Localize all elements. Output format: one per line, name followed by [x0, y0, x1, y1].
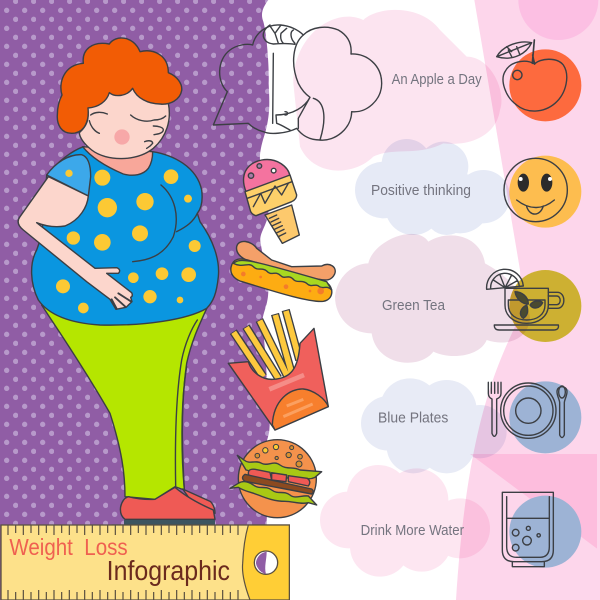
- cloud: Blue Plates: [361, 378, 507, 473]
- purple polka dot panel: [0, 0, 270, 600]
- label: An Apple a Day: An Apple a Day: [392, 72, 482, 88]
- colored circle: water: [509, 496, 581, 568]
- icon: tea cup: [487, 269, 564, 330]
- yellow polka dots: [56, 169, 201, 313]
- icon: smiley: [504, 158, 567, 222]
- ruler end tab: [242, 525, 289, 600]
- icon: head in speech bubble: [213, 25, 382, 140]
- back shoe: [183, 489, 215, 513]
- icon: apple: [497, 40, 567, 111]
- cloud: Green Tea: [335, 234, 530, 363]
- pink circle top right: [518, 0, 598, 40]
- icon: plate and cutlery: [488, 382, 567, 438]
- icon: hot dog: [231, 241, 335, 301]
- label: Drink More Water: Drink More Water: [361, 523, 464, 539]
- title: Infographic: Infographic: [107, 555, 230, 586]
- cloud: An Apple a Day: [293, 10, 501, 171]
- pink right background: [456, 0, 600, 600]
- legs: [42, 305, 208, 499]
- ruler hole: [254, 551, 278, 574]
- front shoe: [120, 487, 215, 519]
- title: Weight Loss: Weight Loss: [9, 534, 128, 560]
- icon: ice cream: [244, 160, 299, 243]
- dress: [32, 147, 219, 325]
- trouser crease: [175, 320, 197, 489]
- icon: burger: [230, 440, 322, 518]
- face: [79, 88, 169, 159]
- icon: water glass: [502, 492, 553, 567]
- hair: [57, 38, 182, 133]
- hole purple sliver: [256, 552, 267, 574]
- label: Blue Plates: Blue Plates: [378, 411, 448, 427]
- scale: [112, 520, 235, 526]
- colored circle: smiley: [509, 156, 581, 228]
- pink triangle: [470, 454, 597, 549]
- dress fold: [133, 185, 197, 262]
- facial lines: [89, 112, 166, 148]
- colored circle: plate: [509, 381, 581, 453]
- fingers: [112, 293, 131, 309]
- cloud: Drink More Water: [320, 465, 490, 577]
- colored circle: tea: [509, 270, 581, 342]
- sleeve: [47, 155, 91, 196]
- ruler body: [1, 525, 289, 600]
- cloud: Positive thinking: [355, 139, 510, 235]
- label: Positive thinking: Positive thinking: [371, 183, 471, 199]
- cheek: [114, 129, 130, 145]
- icon: french fries: [228, 310, 328, 430]
- colored circle: apple: [509, 49, 581, 121]
- woman figure: [18, 38, 235, 526]
- neck: [83, 147, 153, 175]
- arm: [18, 177, 132, 309]
- ruler banner: [1, 525, 289, 600]
- ruler ticks: [8, 525, 238, 600]
- label: Green Tea: Green Tea: [382, 298, 445, 314]
